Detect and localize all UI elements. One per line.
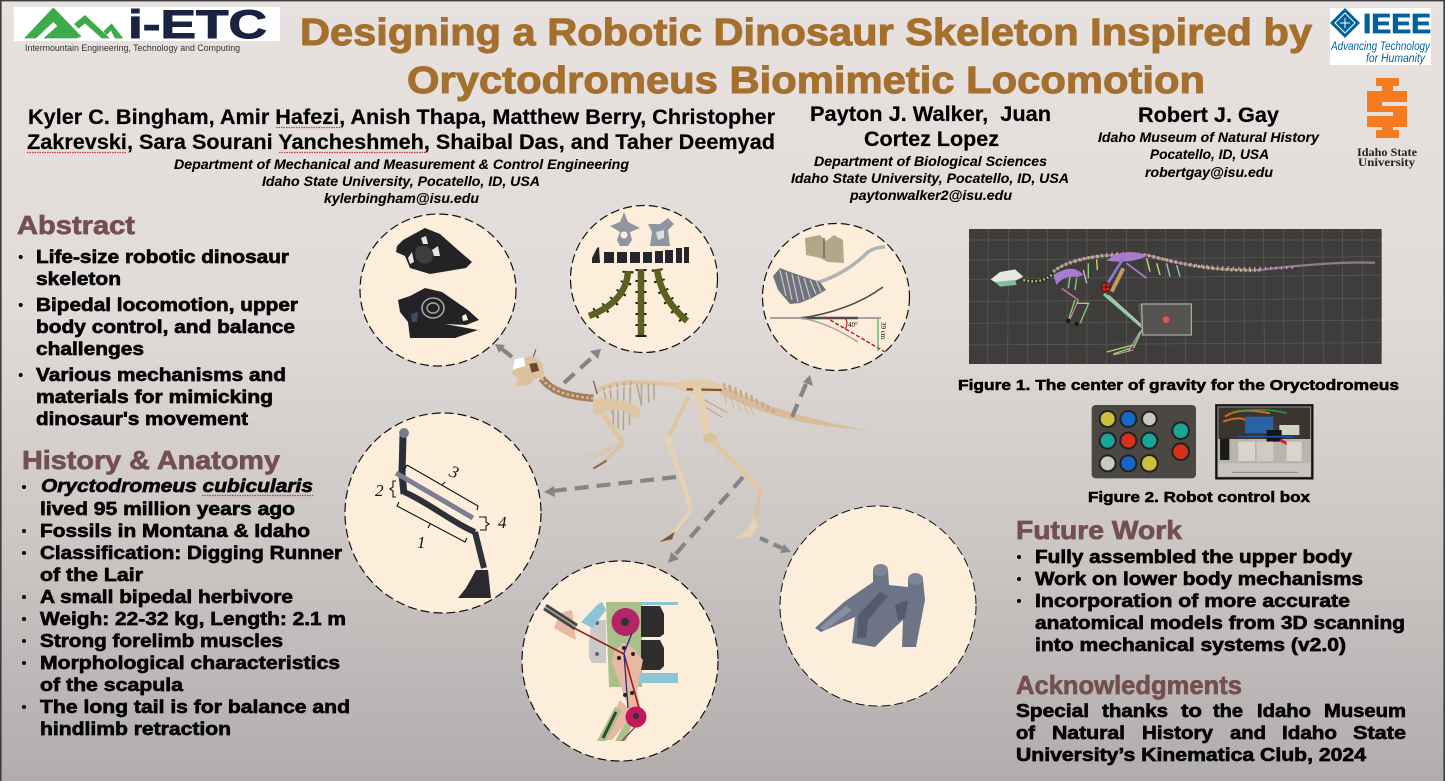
- logo: Idaho State University: University: [1358, 157, 1415, 169]
- acknowledgments text: the: [1213, 701, 1243, 721]
- authors: mechanical engineering group: Kyler C. Bingham, Amir Hafezi, Anish Thapa, Matthew Berry, Christopher: [28, 105, 776, 129]
- authors: mechanical engineering group: kylerbingham@isu.edu: [324, 191, 480, 206]
- acknowledgments text: State: [1353, 723, 1406, 743]
- abstract bullets: Life-size robotic dinosaur: [36, 247, 289, 267]
- dinosaur skeleton: [512, 349, 868, 542]
- history bullets: Fossils in Montana & Idaho: [40, 521, 310, 541]
- circle: forelimb linkage: 1: [417, 533, 426, 552]
- circle: tail range of motion: 40°: [848, 321, 858, 329]
- history bullets: lived 95 million years ago: [40, 499, 295, 519]
- authors: biological sciences group: paytonwalker2@isu.edu: [849, 188, 1013, 203]
- history bullets: Classification: Digging Runner: [40, 543, 342, 563]
- authors: biological sciences group: Payton J. Walker, Juan: [810, 102, 1051, 126]
- abstract bullets: challenges: [36, 339, 144, 359]
- acknowledgments text: Natural: [1052, 723, 1125, 743]
- logo: IEEE: Advancing Technology: [1330, 41, 1431, 53]
- logo: i-ETC: Intermountain Engineering, Technology and Computing: [25, 43, 240, 53]
- figure 2: control box: [1092, 405, 1196, 478]
- abstract bullets: Bipedal locomotion, upper: [36, 295, 298, 315]
- logo: Idaho State University: [1357, 78, 1417, 169]
- future work bullets: Fully assembled the upper body: [1035, 547, 1352, 567]
- circle: tail range of motion: 39 cm: [879, 322, 887, 340]
- arrow: to forelimb circle: [544, 477, 676, 497]
- history bullets: Strong forelimb muscles: [40, 631, 283, 651]
- authors: mechanical engineering group: Idaho State University, Pocatello, ID, USA: [262, 174, 540, 189]
- circle: forelimb linkage: 3: [446, 461, 461, 483]
- future work bullets: into mechanical systems (v2.0): [1035, 635, 1346, 655]
- acknowledgments text: Idaho: [1282, 723, 1337, 743]
- abstract bullets: dinosaur's movement: [36, 409, 248, 429]
- authors: biological sciences group: Idaho State University, Pocatello, ID, USA: [791, 171, 1069, 186]
- circle: foot part: [780, 506, 976, 706]
- history bullets: of the Lair: [40, 565, 143, 585]
- abstract bullets: Various mechanisms and: [36, 365, 286, 385]
- logo: Idaho State University: Idaho State: [1357, 147, 1417, 159]
- title: [300, 12, 1312, 102]
- circle: tail range of motion: [762, 224, 910, 370]
- authors: biological sciences group: Cortez Lopez: [864, 127, 999, 151]
- circle: forelimb linkage: [345, 413, 541, 613]
- history bullets: Morphological characteristics: [40, 653, 340, 673]
- heading: future work: Future Work: [1016, 515, 1183, 545]
- acknowledgments text: of: [1016, 723, 1036, 743]
- arrow: to foot circle: [760, 538, 791, 553]
- authors: mechanical engineering group: Department of Mechanical and Measurement & Control Engineering: [174, 157, 630, 172]
- logo: IEEE: [1330, 8, 1431, 65]
- authors: mechanical engineering group: Zakrevski, Sara Sourani Yancheshmeh, Shaibal Das, and Taher Deemyad: [27, 130, 775, 154]
- author: museum: [1098, 103, 1320, 180]
- future work bullets: anatomical models from 3D scanning: [1035, 613, 1405, 633]
- acknowledgments text: University’s Kinematica Club, 2024: [1016, 745, 1366, 765]
- arrow: to skull circle: [495, 344, 512, 357]
- circle: forelimb linkage: 4: [498, 513, 507, 532]
- future work bullets: Incorporation of more accurate: [1035, 591, 1350, 611]
- figure 2: electronics photo: [1216, 405, 1312, 478]
- logo: IEEE: IEEE: [1363, 8, 1431, 39]
- acknowledgments text: Museum: [1324, 701, 1406, 721]
- heading: history and anatomy: History & Anatomy: [22, 445, 281, 475]
- history bullets: hindlimb retraction: [40, 719, 231, 739]
- figure 1: center of gravity render: [969, 229, 1382, 364]
- figure 2 caption: Figure 2. Robot control box: [1088, 489, 1311, 506]
- abstract bullets: skeleton: [36, 269, 121, 289]
- circle: hip mechanism: [522, 561, 718, 761]
- history bullets: The long tail is for balance and: [40, 697, 350, 717]
- logo: IEEE: for Humanity: [1366, 53, 1426, 65]
- authors: mechanical engineering group: [27, 105, 776, 206]
- acknowledgments text: Special: [1016, 701, 1089, 721]
- logo: i-ETC: i-ETC: [128, 3, 267, 47]
- authors: biological sciences group: Department of Biological Sciences: [814, 154, 1047, 169]
- circle: vertebrae and tail models: [570, 206, 718, 352]
- heading: acknowledgments: Acknowledgments: [1016, 670, 1242, 700]
- circle: skull models: [360, 214, 516, 366]
- title: Oryctodromeus Biomimetic Locomotion: [407, 60, 1205, 102]
- abstract bullets: body control, and balance: [36, 317, 295, 337]
- history bullets: Oryctodromeus cubicularis: [41, 476, 313, 496]
- future work bullets: Work on lower body mechanisms: [1035, 569, 1363, 589]
- authors: biological sciences group: [791, 102, 1069, 203]
- acknowledgments text: and: [1230, 723, 1266, 743]
- history bullets: of the scapula: [40, 675, 184, 695]
- acknowledgments text: to: [1181, 701, 1202, 721]
- author: museum: Pocatello, ID, USA: [1150, 147, 1269, 162]
- history bullets: [22, 476, 350, 739]
- circle: forelimb linkage: 2: [375, 481, 384, 500]
- acknowledgments text: Idaho: [1257, 701, 1311, 721]
- acknowledgments text: thanks: [1102, 701, 1168, 721]
- author: museum: Idaho Museum of Natural History: [1098, 130, 1320, 145]
- acknowledgments text: [1016, 701, 1406, 765]
- abstract bullets: [19, 247, 298, 429]
- history bullets: Weigh: 22-32 kg, Length: 2.1 m: [40, 609, 346, 629]
- figure 1 caption: Figure 1. The center of gravity for the Oryctodromeus: [958, 377, 1399, 394]
- arrow: to tail circle: [792, 375, 813, 417]
- future work bullets: [1017, 547, 1405, 655]
- acknowledgments text: History: [1142, 723, 1213, 743]
- heading: abstract: Abstract: [17, 210, 135, 240]
- history bullets: A small bipedal herbivore: [40, 587, 293, 607]
- author: museum: robertgay@isu.edu: [1145, 165, 1274, 180]
- logo: i-ETC: [14, 3, 280, 53]
- abstract bullets: materials for mimicking: [36, 387, 273, 407]
- arrow: to hip circle: [668, 477, 743, 563]
- title: Designing a Robotic Dinosaur Skeleton Inspired by: [300, 12, 1312, 54]
- arrow: to vertebrae circle: [564, 349, 601, 383]
- author: museum: Robert J. Gay: [1138, 103, 1279, 127]
